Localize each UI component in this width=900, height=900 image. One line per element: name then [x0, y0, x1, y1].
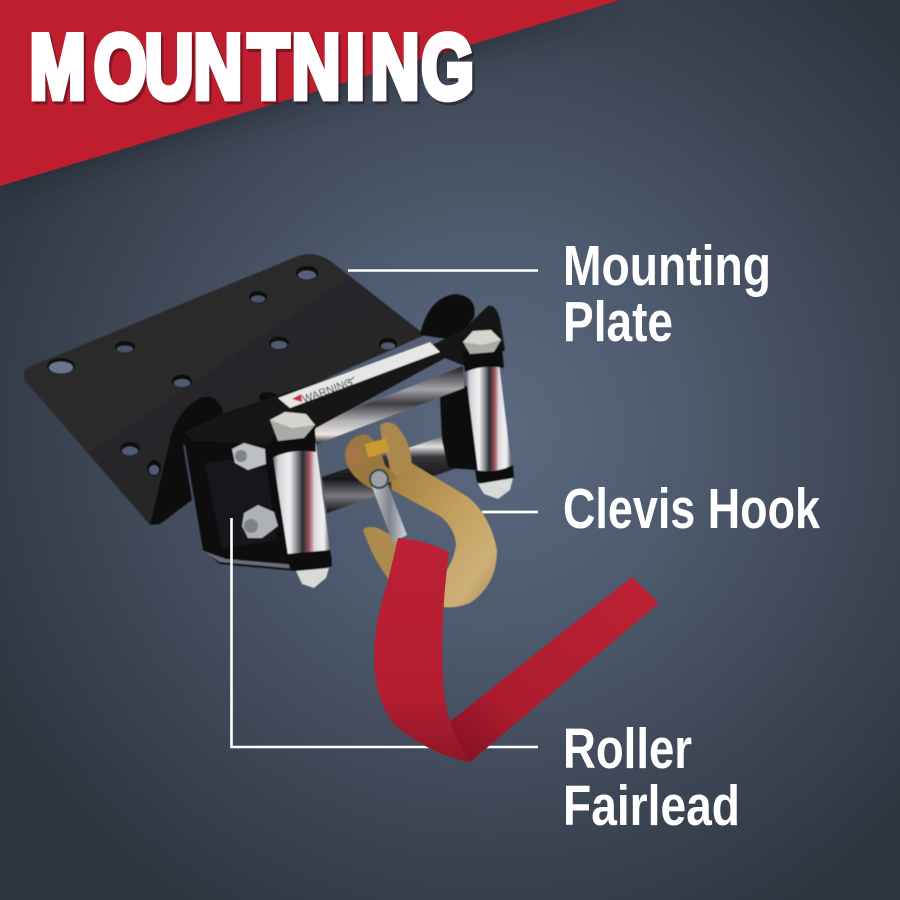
lower horizontal roller	[322, 428, 471, 513]
connector: mounting plate	[348, 269, 538, 272]
corner banner	[0, 0, 620, 195]
connector: roller fairlead	[232, 518, 538, 747]
plate mounting holes	[47, 266, 397, 476]
label: mounting plate: Mounting	[563, 234, 771, 298]
safety latch	[370, 470, 407, 543]
bolts on bracket	[232, 443, 278, 538]
mounting plate	[24, 254, 425, 525]
label: clevis hook: Clevis Hook	[563, 477, 820, 541]
red tow strap	[374, 538, 659, 762]
strap rear sliver	[382, 585, 390, 610]
upper horizontal roller	[313, 366, 464, 444]
label: roller: Roller	[563, 717, 692, 781]
right vertical roller	[463, 330, 514, 499]
rear support bracket	[183, 433, 332, 571]
strap lower tail	[447, 577, 659, 762]
label: fairlead: Fairlead	[563, 774, 740, 838]
clevis hook	[345, 422, 497, 607]
hook body	[388, 458, 497, 607]
connector: clevis hook	[482, 511, 538, 513]
title: MOUNTNING	[30, 16, 474, 117]
right flange lobe	[420, 294, 475, 340]
strap front loop	[374, 538, 470, 762]
hook tip	[363, 527, 400, 588]
warning sticker: WARNING	[301, 376, 355, 406]
warning sticker	[278, 342, 440, 408]
left vertical roller	[270, 412, 332, 588]
label: plate: Plate	[563, 290, 673, 354]
rear upright bracket	[440, 385, 478, 470]
left plate flange	[150, 396, 223, 525]
top fairlead plate	[183, 306, 505, 445]
winch mount hardware	[24, 254, 514, 588]
clevis fork	[345, 422, 412, 490]
